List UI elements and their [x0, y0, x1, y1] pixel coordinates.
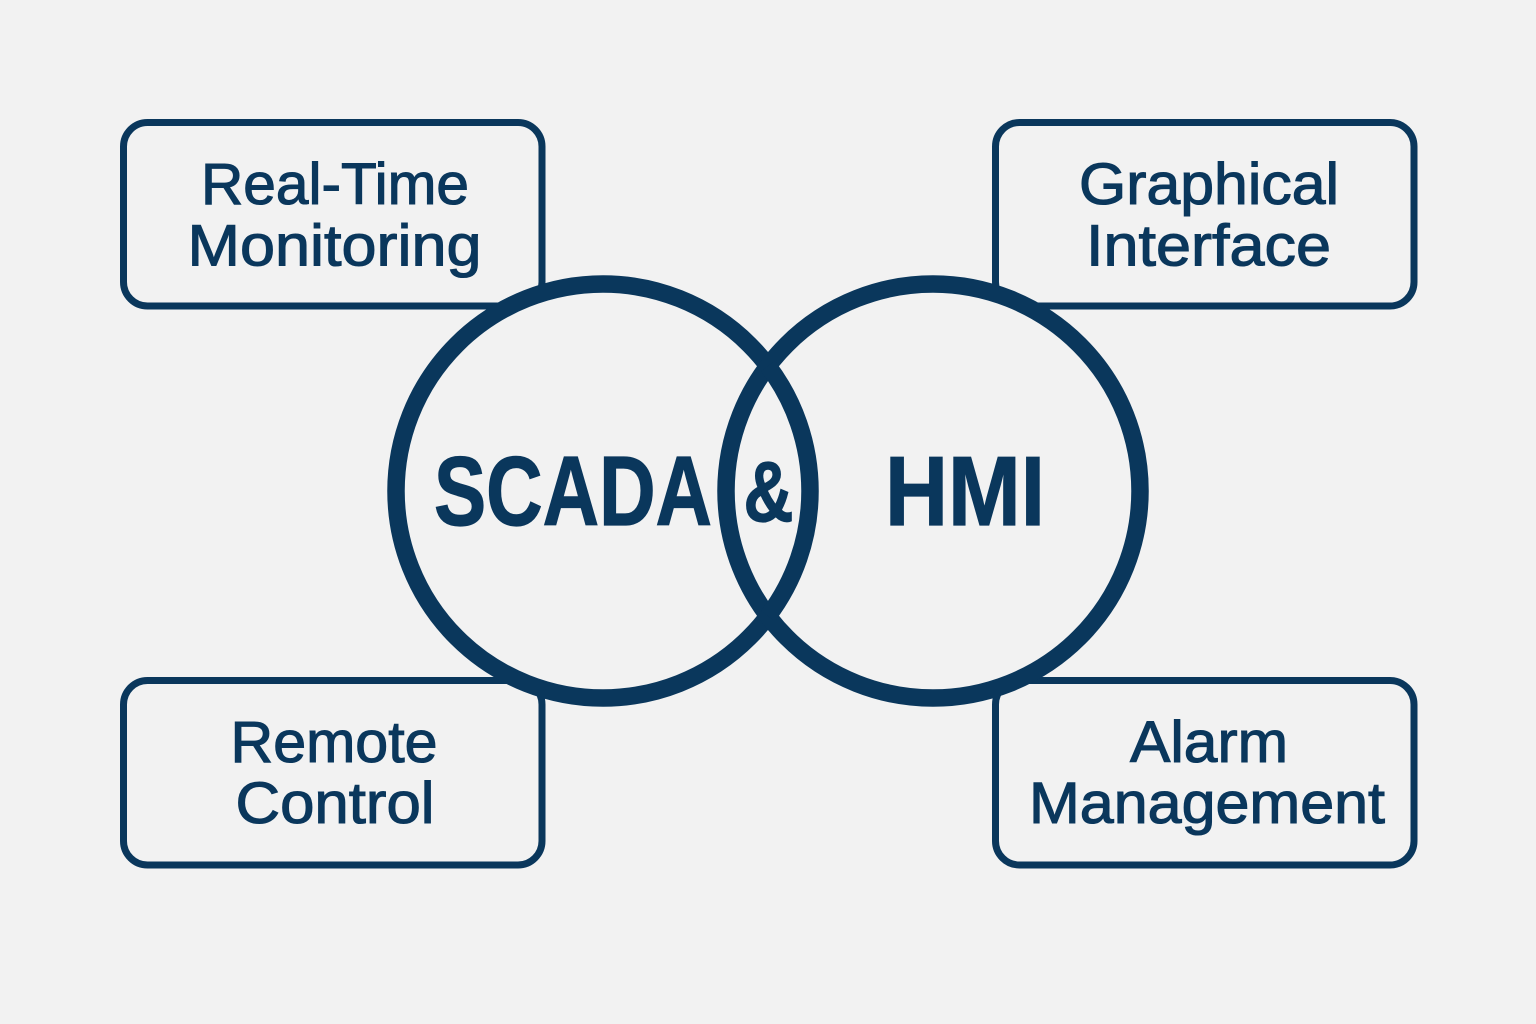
circle overlap: SCADA outline [768, 366, 810, 616]
box: Real-Time Monitoring: Real-Time [201, 152, 469, 217]
box: Remote Control: Control [236, 771, 434, 836]
box: Graphical Interface: Graphical [1079, 152, 1339, 217]
label: SCADA: SCADA [434, 436, 712, 546]
box: Alarm Management: Management [1029, 771, 1385, 836]
box: Alarm Management [996, 680, 1414, 865]
box: Real-Time Monitoring [124, 122, 542, 306]
box: Real-Time Monitoring: Monitoring [188, 214, 482, 278]
label: ampersand: & [744, 445, 794, 540]
circle: HMI [726, 284, 1140, 698]
label: HMI: HMI [885, 436, 1045, 546]
box: Remote Control [124, 680, 542, 865]
box: Graphical Interface: Interface [1086, 214, 1331, 278]
box: Graphical Interface [996, 122, 1414, 306]
box: Remote Control: Remote [230, 710, 438, 775]
circle: SCADA [396, 284, 810, 698]
box: Alarm Management: Alarm [1130, 710, 1288, 775]
